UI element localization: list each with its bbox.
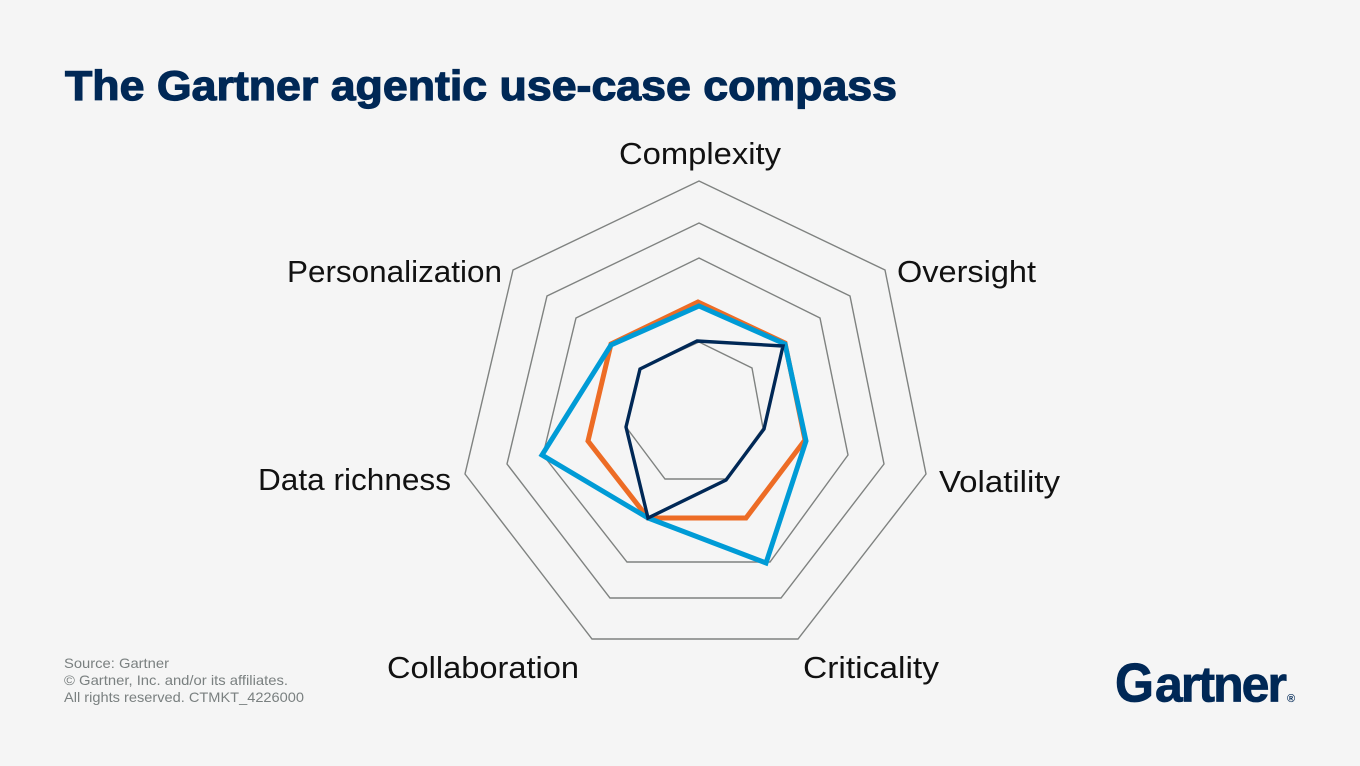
- source note: Source: Gartner: [64, 655, 169, 671]
- axis label: Collaboration: Collaboration: [387, 650, 579, 685]
- axis label: Complexity: Complexity: [619, 136, 782, 171]
- axis label: Volatility: Volatility: [939, 464, 1061, 499]
- axis label: Personalization: Personalization: [287, 254, 502, 289]
- logo: Gartner: ®: [1287, 693, 1295, 705]
- series: blue: [542, 306, 806, 563]
- title: The Gartner agentic use-case compass: [65, 62, 897, 109]
- axis label: Criticality: Criticality: [803, 650, 940, 685]
- logo: Gartner: G: [1115, 652, 1154, 714]
- grid rings: [465, 181, 926, 639]
- logo: Gartner: [1115, 652, 1295, 714]
- source note: [64, 655, 304, 705]
- axis label: Oversight: Oversight: [897, 254, 1036, 289]
- source note: All rights reserved. CTMKT_4226000: [64, 689, 304, 705]
- radar chart: [465, 181, 926, 639]
- source note: © Gartner, Inc. and/or its affiliates.: [64, 672, 288, 688]
- logo: Gartner: artner: [1155, 656, 1287, 712]
- series: orange: [588, 302, 805, 518]
- axis label: Data richness: Data richness: [258, 462, 451, 497]
- series: navy: [626, 341, 783, 518]
